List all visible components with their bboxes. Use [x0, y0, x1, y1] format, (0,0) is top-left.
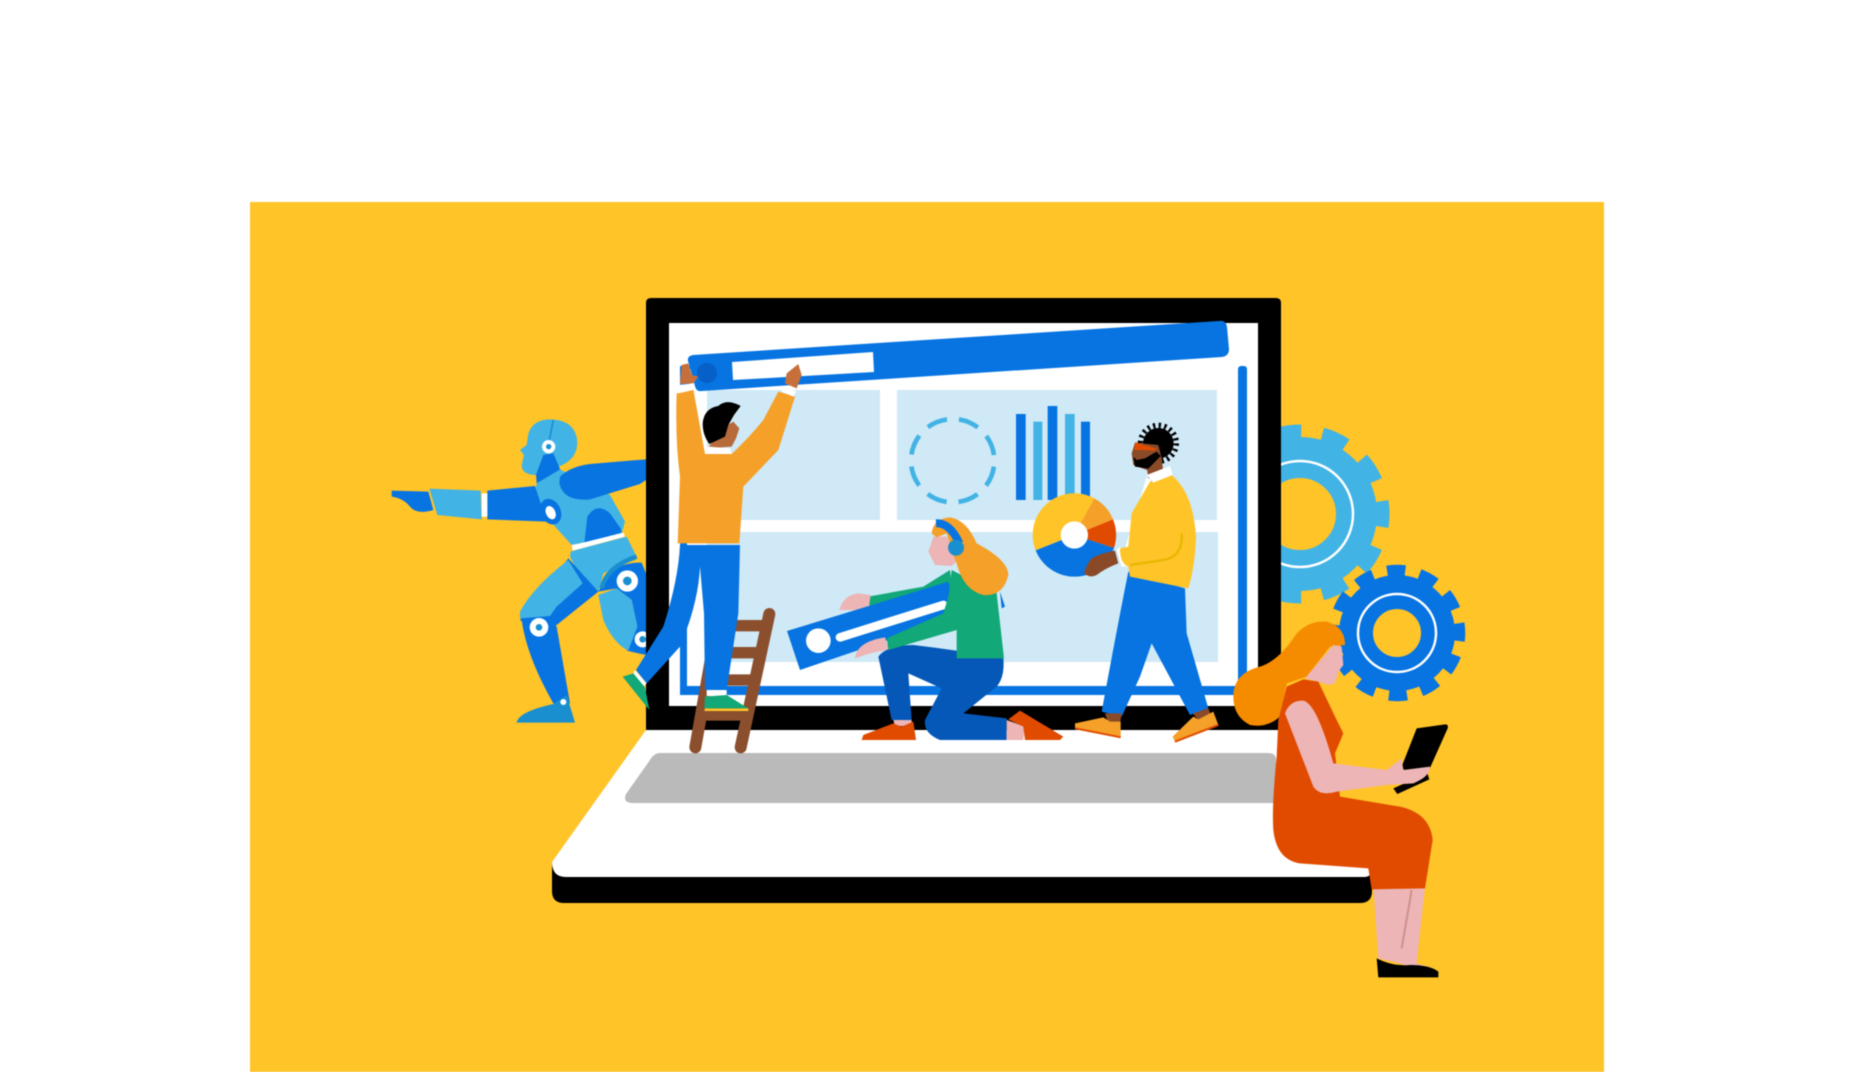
- person: seated woman in red dress with tablet: [1233, 621, 1448, 977]
- person: kneeling woman with headphones holding a slider: [787, 517, 1063, 740]
- dashed circle chart: [911, 419, 994, 502]
- laptop keyboard area: [625, 753, 1276, 803]
- ladder: [695, 614, 769, 747]
- icon: blue gear: [1335, 571, 1459, 695]
- person: man in yellow sweater with donut chart: [1033, 425, 1218, 742]
- slider bar: [787, 582, 957, 670]
- yellow background panel: [250, 202, 1604, 1072]
- bar chart: [1016, 406, 1090, 500]
- dashboard panels: [707, 390, 1218, 662]
- robot figure: [392, 419, 651, 723]
- laptop base: [552, 730, 1372, 903]
- toolbar being placed on the screen: [680, 321, 1229, 391]
- person: man in orange sweater: [623, 363, 802, 711]
- tablet: [1393, 724, 1448, 794]
- donut chart: [1033, 493, 1116, 577]
- laptop screen: [646, 298, 1281, 730]
- icon: light blue gear: [1217, 431, 1383, 597]
- screen frame lines: [680, 366, 1247, 695]
